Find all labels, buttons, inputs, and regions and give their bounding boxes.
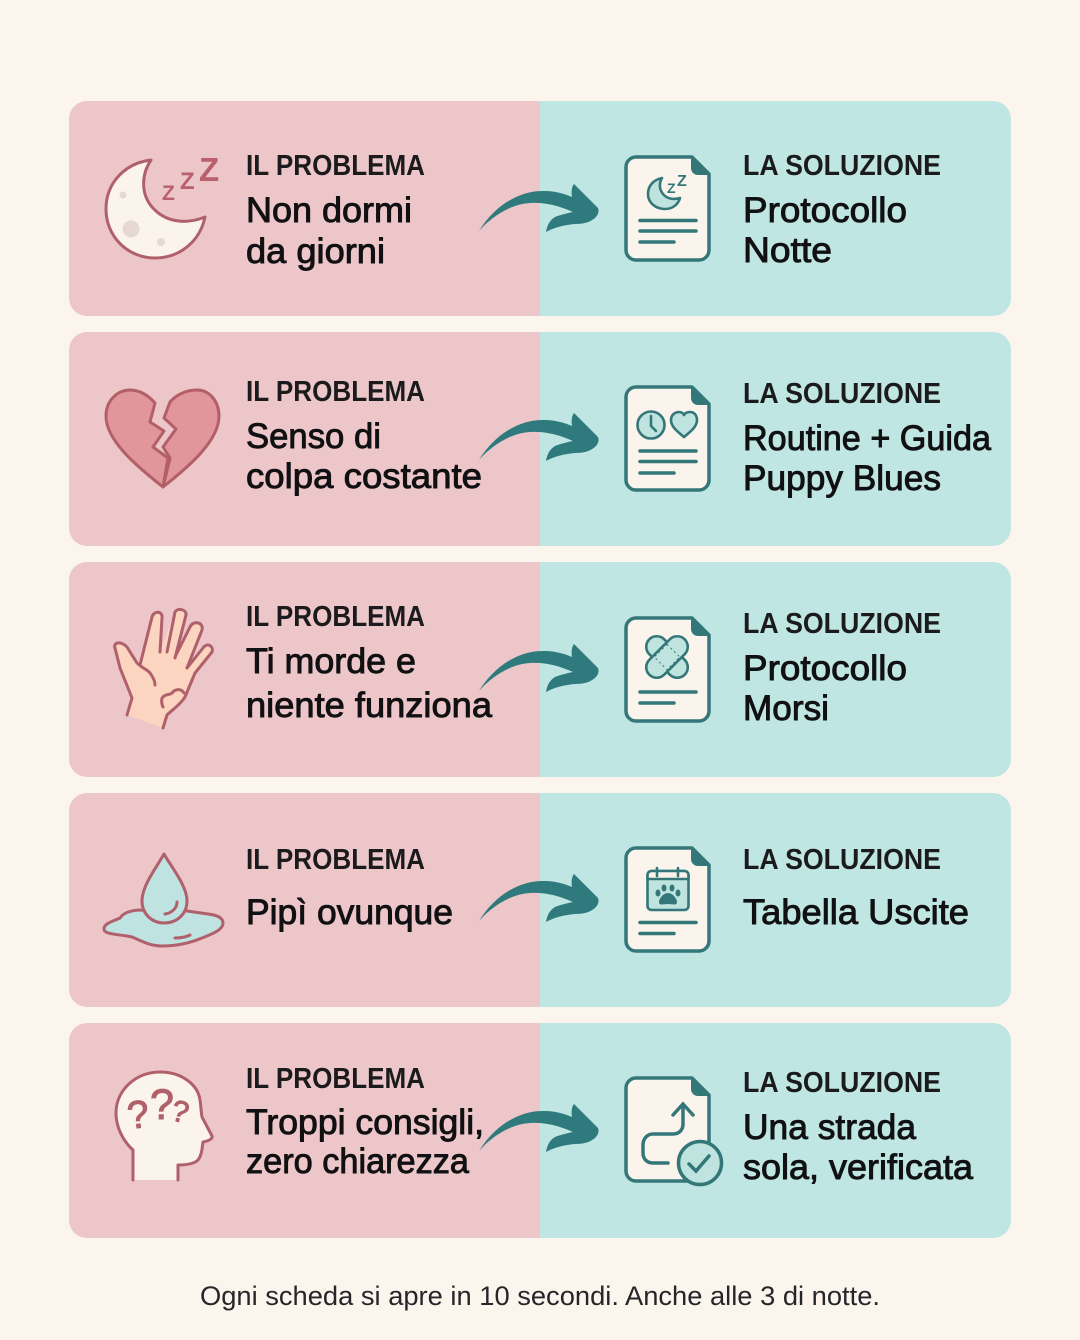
footer note: Ogni scheda si apre in 10 secondi. Anche alle 3 di notte. [200, 1281, 880, 1311]
problem title 2: Senso di [246, 417, 381, 456]
icon: routine and guide document [626, 387, 709, 490]
panel: problem 3 [69, 562, 540, 777]
solution title 2: Routine + Guida [743, 419, 992, 458]
row 5: troppi consigli [69, 1023, 1011, 1238]
problem title 2 [246, 417, 482, 496]
problem title 2: colpa costante [246, 457, 482, 496]
icon: verified path document [626, 1078, 722, 1184]
solution title 1: Notte [743, 231, 832, 270]
icon: bite protocol document [626, 618, 709, 721]
solution title 3: Protocollo [743, 649, 907, 688]
icon: confused head: ? [168, 1094, 192, 1130]
solution title 5: sola, verificata [743, 1148, 974, 1187]
icon: confused head: ? [125, 1093, 151, 1138]
solution title 1: Protocollo [743, 191, 907, 230]
arrow 1 [479, 184, 599, 232]
icon: confused head: ? [150, 1081, 174, 1129]
problem label 2: IL PROBLEMA [246, 376, 425, 408]
icon: night protocol document: Z [677, 173, 687, 190]
arrow 5 [479, 1104, 599, 1152]
arrow 3 [479, 644, 599, 692]
problem title 1: Non dormi [246, 191, 412, 230]
problem title 5: zero chiarezza [246, 1142, 470, 1181]
icon: night protocol document [626, 157, 709, 260]
icon: sleeping moon: Z [162, 182, 175, 205]
solution title 3 [743, 649, 907, 728]
panel: problem 4 [69, 793, 540, 1007]
problem title 1: da giorni [246, 232, 385, 271]
solution label 2: LA SOLUZIONE [743, 378, 941, 410]
panel: solution 2 [540, 332, 1011, 546]
solution label 5: LA SOLUZIONE [743, 1067, 941, 1099]
solution title 3: Morsi [743, 689, 829, 728]
icon: sleeping moon [106, 151, 219, 258]
problem label 3: IL PROBLEMA [246, 601, 425, 633]
icon: confused head [116, 1072, 212, 1180]
icon: sleeping moon: Z [199, 151, 219, 188]
solution label 3: LA SOLUZIONE [743, 608, 941, 640]
icon: bitten hand [115, 609, 212, 728]
solution title 4: Tabella Uscite [743, 893, 969, 932]
problem title 5: Troppi consigli, [246, 1103, 484, 1142]
panel: solution 5 [540, 1023, 1011, 1238]
solution title 2: Puppy Blues [743, 459, 941, 498]
problem title 3: niente funziona [246, 686, 493, 725]
panel: problem 2 [69, 332, 540, 546]
panel: solution 3 [540, 562, 1011, 777]
row 3: morsi [69, 562, 1011, 777]
icon: drop and puddle [104, 854, 223, 946]
solution title 5 [743, 1108, 974, 1187]
panel: solution 1 [540, 101, 1011, 316]
solution title 2 [743, 419, 992, 498]
problem title 1 [246, 191, 412, 271]
solution label 4: LA SOLUZIONE [743, 844, 941, 876]
row 1: non dormi [69, 101, 1011, 316]
problem title 3: Ti morde e [246, 642, 416, 681]
solution title 1 [743, 191, 907, 270]
panel: problem 1 [69, 101, 540, 316]
panel: solution 4 [540, 793, 1011, 1007]
icon: night protocol document: Z [667, 180, 676, 196]
icon: outings calendar document [626, 848, 709, 951]
row 4: pipi [69, 793, 1011, 1007]
panel: problem 5 [69, 1023, 540, 1238]
icon: sleeping moon: Z [180, 168, 195, 195]
problem title 5 [246, 1103, 484, 1181]
problem label 5: IL PROBLEMA [246, 1063, 425, 1095]
icon: broken heart [106, 390, 219, 487]
arrow 4 [479, 874, 599, 922]
solution title 5: Una strada [743, 1108, 917, 1147]
problem label 4: IL PROBLEMA [246, 844, 425, 876]
arrow 2 [479, 413, 599, 461]
problem title 3 [246, 642, 493, 725]
row 2: senso di colpa [69, 332, 1011, 546]
solution label 1: LA SOLUZIONE [743, 150, 941, 182]
problem label 1: IL PROBLEMA [246, 150, 425, 182]
problem title 4: Pipì ovunque [246, 893, 453, 932]
